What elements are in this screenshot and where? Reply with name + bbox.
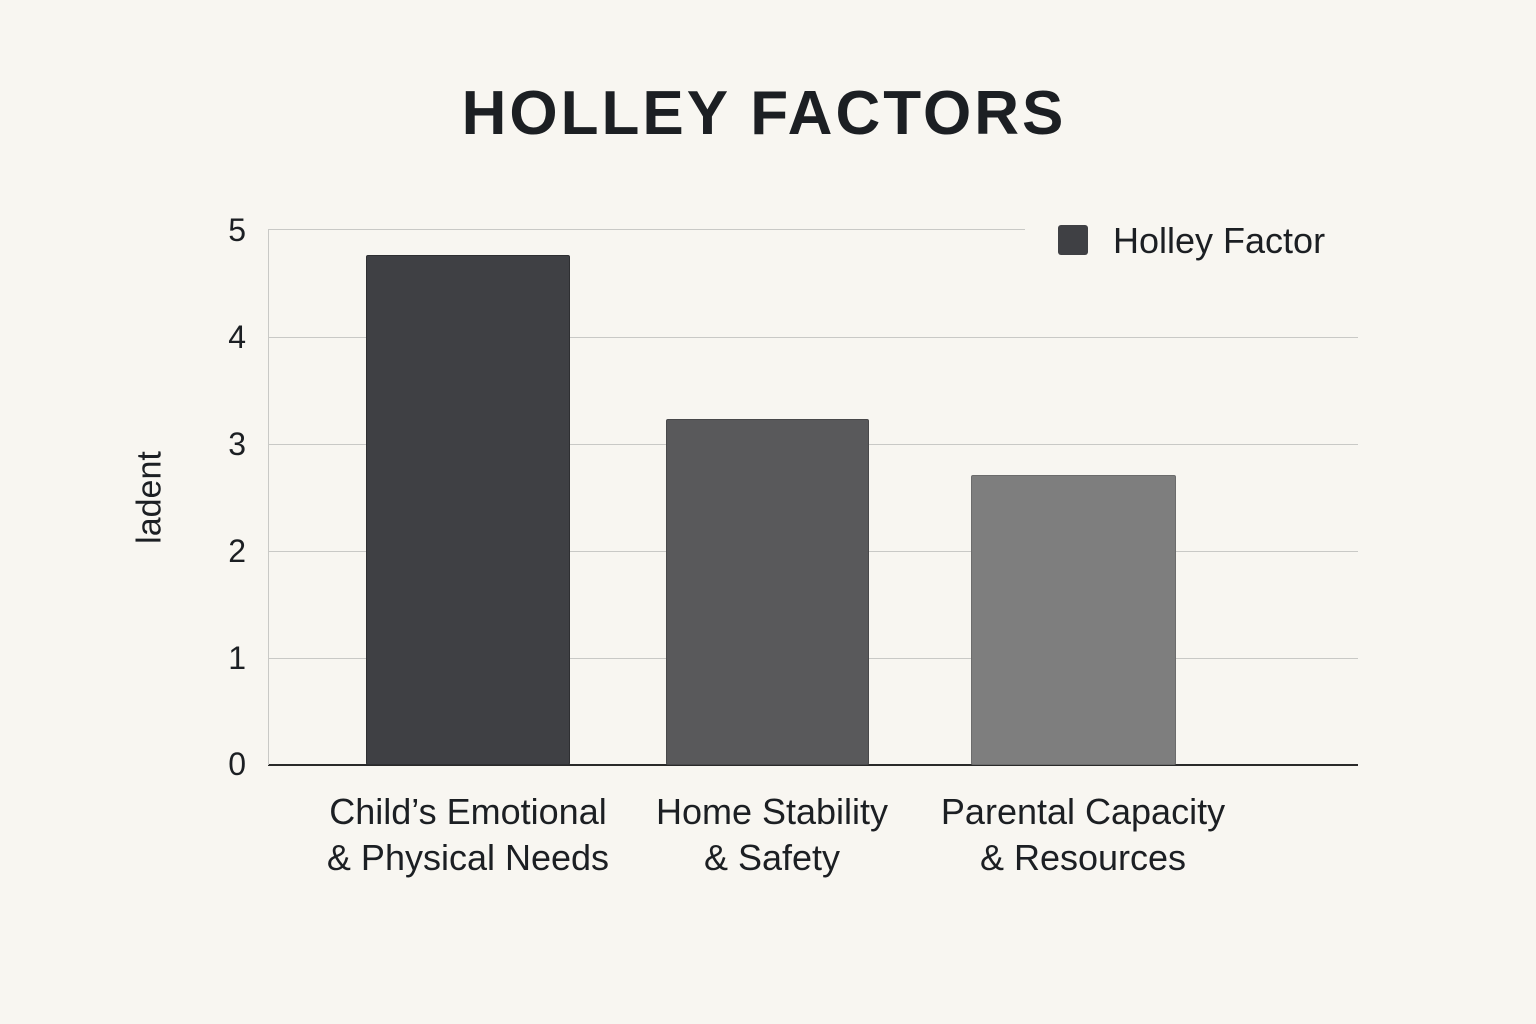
category labels: Parental Capacity: [941, 791, 1225, 832]
category labels: & Resources: [980, 837, 1186, 878]
y tick labels: 5: [228, 212, 246, 248]
category labels: & Safety: [704, 837, 840, 878]
category labels: Child’s Emotional: [329, 791, 607, 832]
y tick labels: 0: [228, 746, 246, 782]
bar: child's needs: [366, 255, 570, 765]
y tick labels: 4: [228, 319, 246, 355]
title: HOLLEY FACTORS: [462, 79, 1066, 148]
category labels: Home Stability: [656, 791, 888, 832]
y tick labels: 2: [228, 533, 246, 569]
y tick labels: 3: [228, 426, 246, 462]
y axis label: ladent: [130, 451, 168, 544]
y tick labels: [228, 212, 246, 782]
bar: parental capacity: [971, 475, 1176, 765]
legend: Holley Factor: [1113, 220, 1325, 261]
bar: home stability: [666, 419, 869, 765]
chart: [268, 229, 1358, 766]
category labels: & Physical Needs: [327, 837, 609, 878]
category labels: [327, 791, 1225, 878]
y tick labels: 1: [228, 640, 246, 676]
